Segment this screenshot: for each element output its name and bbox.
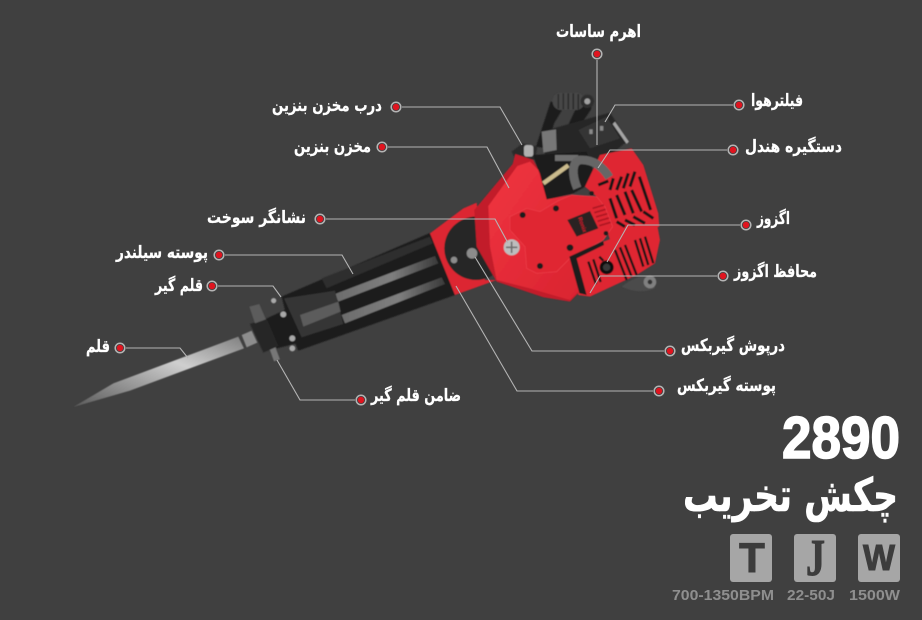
chisel [73,337,244,407]
filter edge [613,122,629,144]
screw slot [506,242,517,253]
fuel gauge screw [504,239,520,255]
dark seam [569,241,604,295]
label: choke lever: اهرم ساسات [556,22,641,42]
label: cylinder housing: پوسته سیلندر [115,243,208,263]
upright pin [249,304,266,323]
spec icon: J: J [806,530,825,587]
model number: 2890 [782,405,900,471]
exhaust hole [600,260,614,274]
cover screws [520,191,608,269]
engine parts [555,155,578,161]
spec icon: W: W [863,537,895,578]
label: fuel tank cap: درب مخزن بنزین [272,96,382,116]
engine gap [533,152,597,200]
engine assembly [430,93,660,302]
wheel centre [648,280,652,284]
foot wheel [644,276,656,288]
spec value: impact energy: 22-50J [787,587,835,604]
fuel pipes [543,165,568,183]
label: fuel gauge: نشانگر سوخت [207,207,306,228]
grip bolt [581,95,594,108]
main front shell [488,162,587,300]
label: air filter: فیلترهوا [751,91,803,111]
spec icon: T: T [739,534,765,581]
collar light [300,302,341,327]
carry handle rear arm [568,101,593,127]
cylinder shell [282,233,455,351]
filter knobs [589,126,603,134]
exhaust inner [603,264,610,271]
rubber grip [553,93,584,110]
rib lower [342,277,445,323]
cover vents [593,205,611,226]
label: chisel holder: قلم گیر [154,275,203,296]
filter vent [542,129,557,153]
marker dots [115,49,751,405]
spec value: power: 1500W [849,587,901,604]
rib upper [335,256,438,302]
collar ring [284,291,343,337]
gear disc [444,217,508,280]
label: chisel holder latch: ضامن قلم گیر [370,385,461,406]
air filter box [542,113,629,160]
logo plate [567,211,598,237]
label: exhaust guard: محافظ اگزوز [733,261,817,282]
spec value: impact rate: 700-1350BPM [672,587,774,604]
bolt centre [584,98,590,104]
label: gearbox cover: درپوش گیربکس [681,335,785,356]
label: exhaust: اگزوز [756,208,790,229]
bolts [271,298,295,351]
retainer pin [269,346,280,361]
cap metal [524,145,533,157]
spec icon: T [730,534,772,582]
main rear shell [474,154,578,302]
disc bolts [451,248,477,263]
label: gearbox housing: پوسته گیربکس [677,375,776,396]
hammer illustration [73,93,660,407]
foot pad [622,276,655,291]
neck [263,310,297,348]
logo text: Ronix [576,217,587,234]
chisel collar [242,331,257,347]
front block [250,319,278,353]
label: fuel tank: مخزن بنزین [294,137,371,157]
spec icon: W [858,534,900,582]
grille slots [598,172,653,227]
fuel cap [512,143,537,160]
gear cover [510,195,613,273]
spec icon: J [794,530,836,587]
label: chisel: قلم [86,337,110,357]
exhaust guard [573,222,660,297]
upper shell highlight [322,237,433,288]
grip ribs [558,93,578,109]
cylinder and chisel [73,233,455,407]
leader lines [126,60,740,400]
guard slots [588,237,653,284]
carry handle front arm [536,102,565,148]
label: handle grip: دستگیره هندل [745,136,842,157]
rear red cover [585,148,659,240]
filter face [578,117,620,148]
starter handle [573,160,609,188]
gearbox casing [430,203,497,295]
